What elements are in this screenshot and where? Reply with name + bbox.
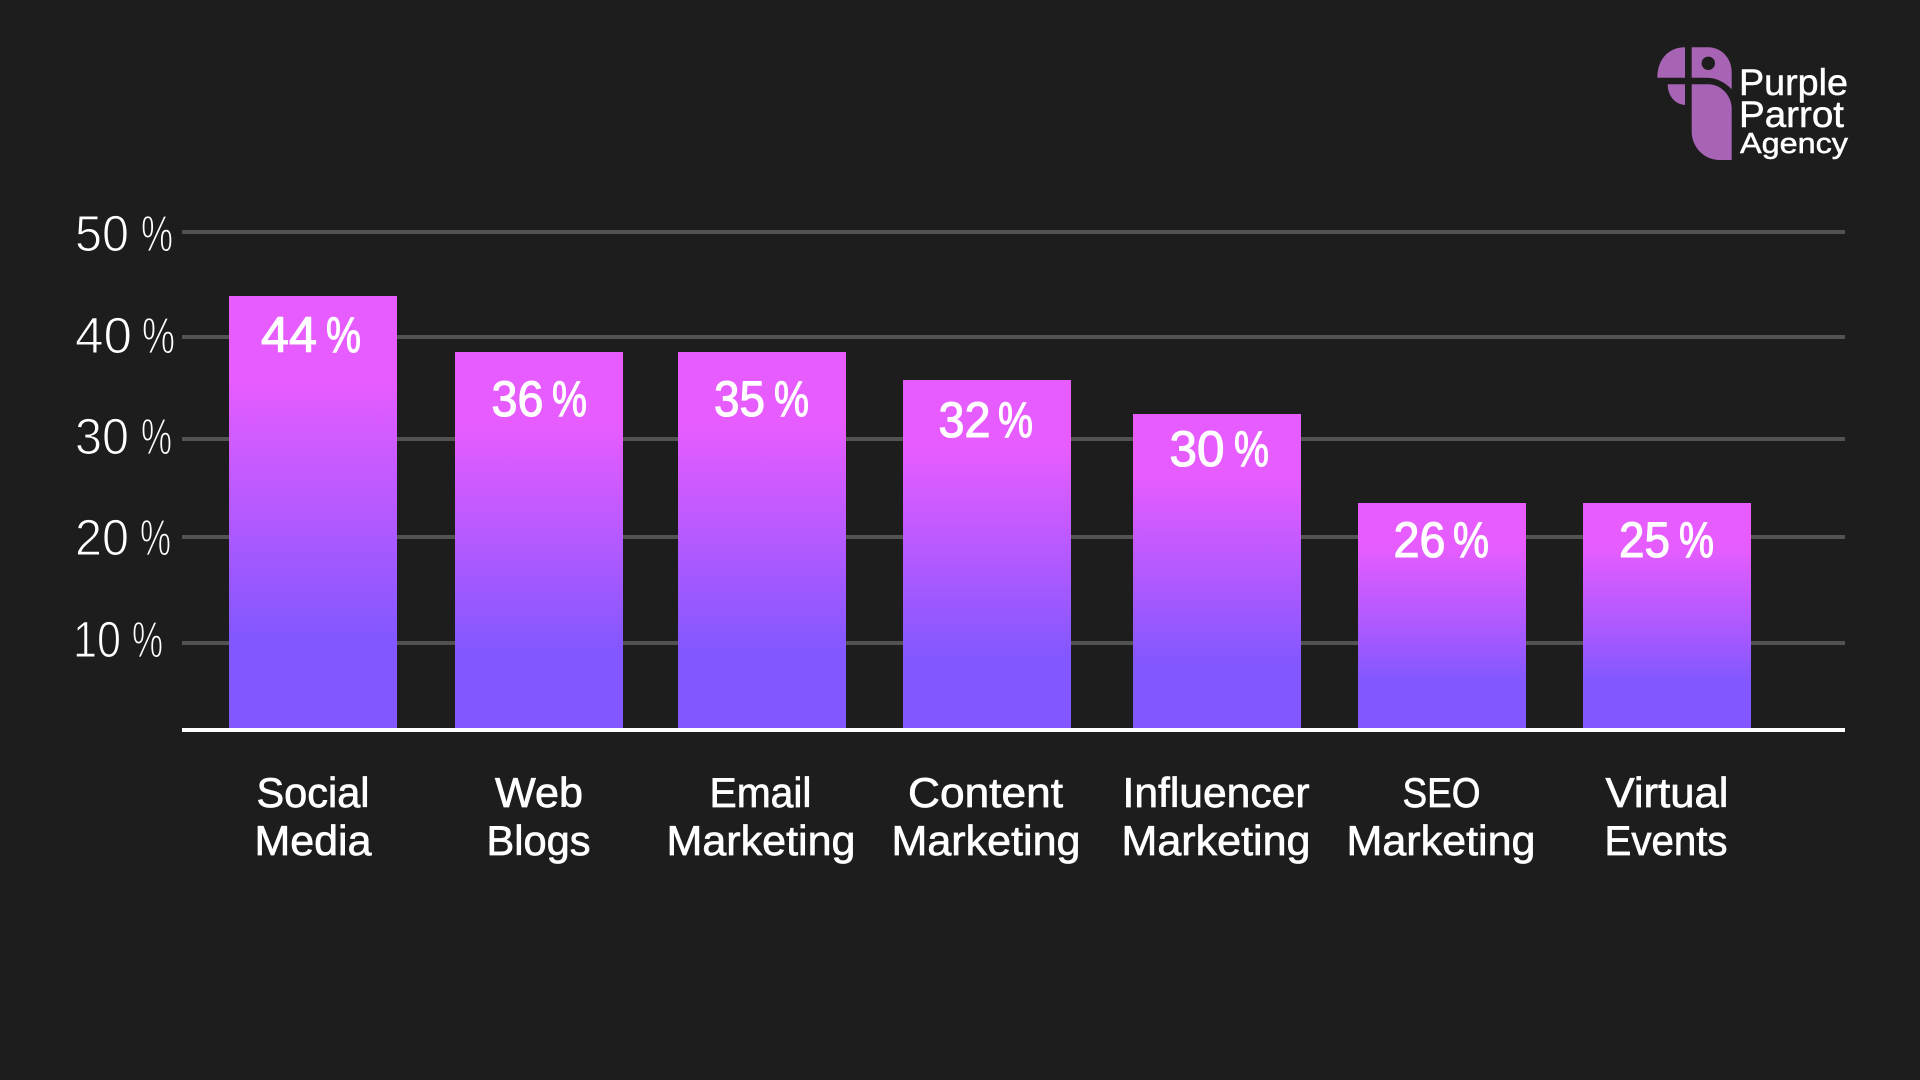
bar: Virtual Events 25%	[1583, 503, 1751, 728]
bar: Influencer Marketing 30%	[1133, 414, 1301, 728]
label: Content Marketing	[892, 769, 1080, 864]
bar: Content Marketing 32%: 32	[938, 392, 990, 448]
icon: parrot mark	[1657, 47, 1732, 160]
y-axis labels: 40	[75, 307, 132, 364]
label: Influencer Marketing	[1122, 769, 1310, 864]
bar: Web Blogs 36%	[455, 352, 623, 728]
y-axis labels: 30	[75, 408, 129, 465]
label: Social Media: Media	[254, 817, 372, 864]
label: SEO Marketing: SEO	[1402, 769, 1480, 816]
bar: Virtual Events 25%: 25	[1619, 512, 1670, 568]
label: Email Marketing: Email	[710, 769, 812, 816]
label: Web Blogs	[486, 769, 590, 864]
bar: Web Blogs 36%: 36	[492, 371, 544, 427]
label: Influencer Marketing: Marketing	[1122, 817, 1310, 864]
label: Content Marketing: Content	[908, 769, 1063, 816]
logo wordmark	[1739, 62, 1849, 160]
bar: Content Marketing 32%	[903, 380, 1071, 728]
y-axis labels: 20	[75, 509, 129, 566]
y-axis labels: %	[142, 307, 175, 364]
y-axis labels: 50	[75, 205, 129, 262]
bar: Social Media 44%: %	[326, 307, 361, 363]
label: Content Marketing: Marketing	[892, 817, 1080, 864]
bar: Virtual Events 25%: %	[1679, 512, 1714, 568]
bar: Content Marketing 32%: %	[998, 392, 1033, 448]
category labels	[254, 769, 1728, 864]
logo wordmark: Parrot	[1739, 94, 1845, 135]
bar: Web Blogs 36%: %	[552, 371, 587, 427]
logo: Purple Parrot Agency	[1657, 47, 1849, 160]
bar: Social Media 44%	[229, 296, 397, 728]
y-axis labels: %	[141, 205, 173, 262]
bar: SEO Marketing 26%	[1358, 503, 1526, 728]
bar: Email Marketing 35%	[678, 352, 846, 728]
y-axis labels: %	[140, 509, 171, 566]
bar: SEO Marketing 26%: 26	[1394, 512, 1446, 568]
y-axis labels: %	[141, 408, 172, 465]
bar: Email Marketing 35%: 35	[714, 371, 765, 427]
label: Email Marketing	[666, 769, 856, 864]
y-axis labels	[73, 205, 175, 668]
bar chart	[229, 296, 1751, 728]
label: Virtual Events	[1604, 769, 1728, 864]
label: Virtual Events: Events	[1604, 817, 1728, 864]
bar: Influencer Marketing 30%: 30	[1170, 421, 1224, 477]
logo wordmark: Purple	[1739, 62, 1848, 103]
bar: SEO Marketing 26%: %	[1453, 512, 1489, 568]
label: Email Marketing: Marketing	[666, 817, 856, 864]
bar: Email Marketing 35%: %	[774, 371, 809, 427]
y-axis labels: %	[132, 611, 163, 668]
label: SEO Marketing: Marketing	[1346, 817, 1536, 864]
y-axis labels: 10	[73, 611, 121, 668]
label: SEO Marketing	[1346, 769, 1536, 864]
label: Virtual Events: Virtual	[1606, 769, 1728, 816]
label: Web Blogs: Blogs	[486, 817, 590, 864]
label: Influencer Marketing: Influencer	[1122, 769, 1310, 816]
label: Web Blogs: Web	[495, 769, 583, 816]
label: Social Media: Social	[256, 769, 370, 816]
logo wordmark: Agency	[1740, 128, 1849, 160]
label: Social Media	[254, 769, 372, 864]
bar: Influencer Marketing 30%: %	[1234, 421, 1269, 477]
bar: Social Media 44%: 44	[261, 307, 317, 363]
